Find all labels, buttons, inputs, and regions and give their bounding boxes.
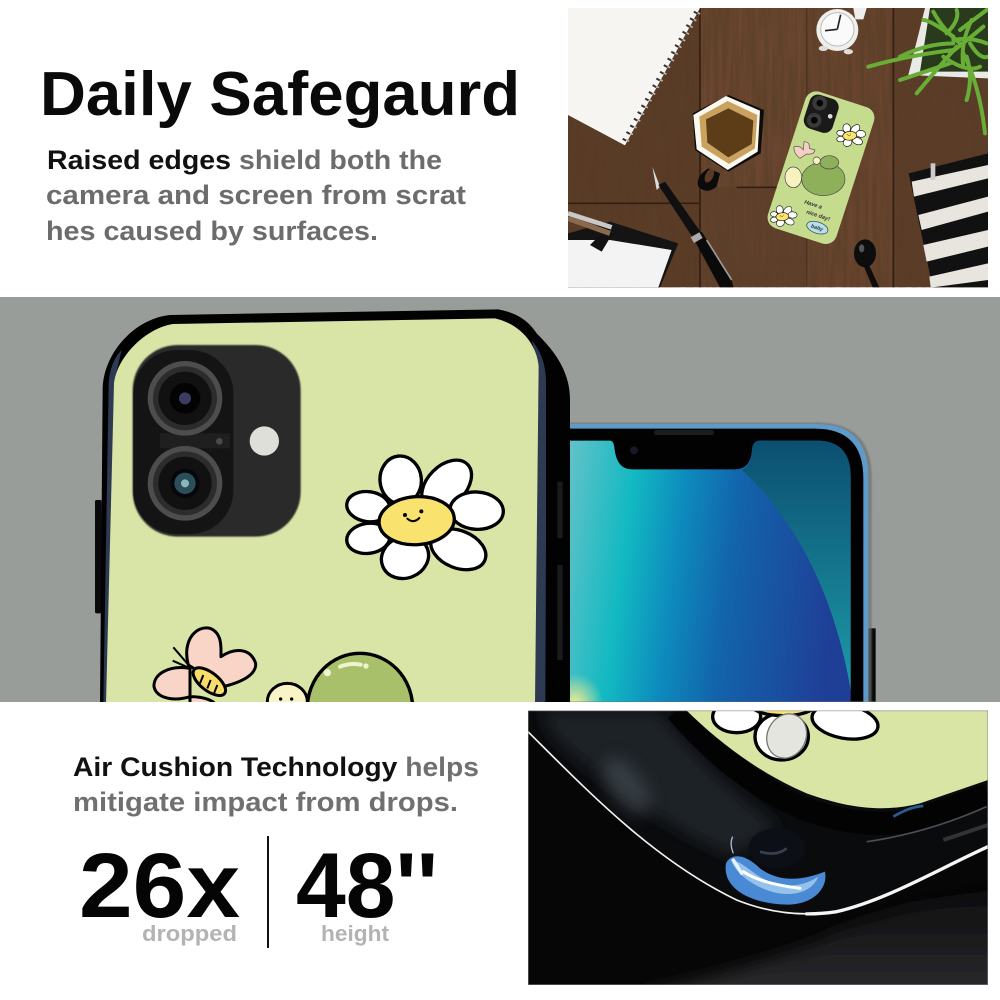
text block: raised edges: hes caused by surfaces.	[46, 216, 378, 246]
dark bubble	[748, 828, 805, 868]
floor highlight	[620, 887, 1000, 1000]
side button left	[95, 500, 102, 613]
image border	[528, 711, 988, 985]
butterfly sticker	[154, 628, 256, 713]
earpiece	[654, 430, 714, 435]
turtle small	[785, 167, 802, 188]
microphone	[216, 438, 223, 445]
white edge thick part	[528, 732, 988, 914]
wood planks	[568, 8, 988, 287]
lens: bottom	[148, 446, 222, 521]
blue metal frame	[560, 424, 868, 703]
side button lower	[557, 565, 563, 660]
green back	[106, 318, 539, 703]
dark background	[528, 711, 988, 985]
phone with green case	[765, 88, 877, 247]
soft shadow	[560, 423, 872, 703]
text block: raised edges: camera and screen from scrat	[46, 180, 466, 210]
tiny message: baby	[810, 224, 825, 233]
divider white strip under band	[0, 702, 1000, 711]
tiny message: Have a	[803, 200, 823, 211]
highlight patch	[594, 750, 659, 824]
front camera	[630, 446, 638, 454]
text block: air cushion	[73, 752, 479, 817]
text block: raised edges: Raised edges shield both the	[47, 145, 442, 175]
flower sticker crop	[713, 694, 881, 765]
earbud	[854, 239, 879, 287]
bumper sheen	[540, 711, 780, 857]
white edge line	[528, 732, 988, 914]
flash	[250, 426, 279, 456]
dark wallpaper corner	[742, 441, 851, 690]
tiny message	[803, 200, 831, 236]
photo: phone on wooden desk	[568, 8, 988, 287]
coffee cup	[693, 95, 764, 191]
camera module small	[804, 94, 839, 133]
blue edge strip	[103, 340, 546, 703]
inner edge highlight	[867, 807, 987, 842]
tiny message: nice day!	[805, 210, 831, 223]
stat: 26x dropped: dropped	[142, 921, 237, 946]
black band next to green	[677, 711, 988, 823]
stat: 48 inches height: height	[321, 921, 390, 946]
side button	[868, 628, 876, 705]
screen	[570, 441, 851, 703]
stat: 48 inches height: 48''	[296, 835, 438, 937]
turtle sticker	[266, 652, 414, 702]
camera module	[133, 345, 301, 537]
alarm clock	[816, 8, 867, 54]
yellow glow	[570, 674, 602, 702]
text block: air cushion: mitigate impact from drops.	[73, 787, 458, 817]
case black body	[100, 309, 570, 703]
striped notebook	[909, 153, 988, 287]
notebook	[568, 8, 700, 145]
stat divider	[267, 836, 269, 948]
phone front: screen with notch	[570, 422, 876, 702]
potted plant	[868, 8, 988, 133]
pen	[652, 167, 733, 287]
lens: top	[148, 361, 222, 436]
text block: air cushion: Air Cushion Technology helps	[73, 752, 479, 782]
black bezel	[560, 429, 863, 703]
title: Daily Safegaurd	[40, 60, 520, 129]
photo: air cushion corner close-up	[528, 694, 1000, 1000]
butterfly small	[794, 142, 815, 158]
phone back: green case	[94, 309, 570, 702]
case bumper	[528, 711, 988, 914]
blue air cushion	[726, 856, 825, 905]
green case surface	[687, 711, 988, 808]
gray band	[0, 297, 1000, 702]
flower sticker	[345, 451, 504, 585]
side buttons	[557, 482, 563, 538]
text block: raised edges	[46, 145, 466, 246]
stat: 26x dropped: 26x	[79, 835, 240, 937]
clipboard	[568, 213, 678, 287]
